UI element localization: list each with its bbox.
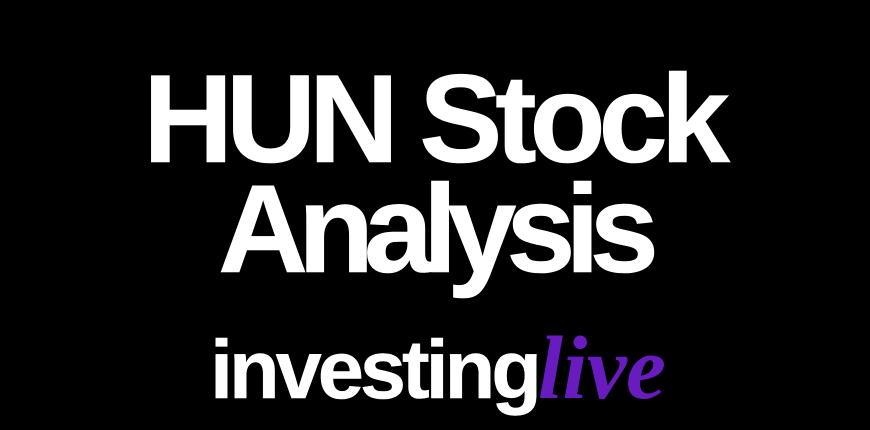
title — [143, 50, 730, 299]
logo: investinglive: live — [538, 319, 666, 418]
title: Analysis — [218, 160, 659, 299]
logo: investinglive: investing — [210, 323, 542, 416]
title: HUN Stock — [143, 50, 730, 189]
logo: investinglive — [210, 319, 666, 418]
